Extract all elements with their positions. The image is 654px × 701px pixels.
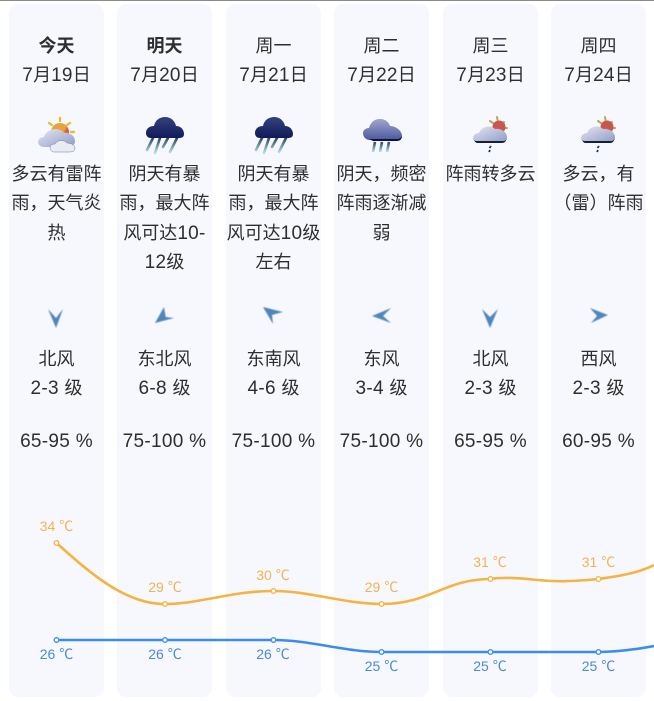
wind: 3-4 级 bbox=[356, 378, 407, 399]
icon: wind arrow north bbox=[482, 309, 498, 328]
wind: 2-3 级 bbox=[31, 378, 82, 399]
low temperature line: 26 ℃ bbox=[148, 646, 182, 662]
wind: 东风 bbox=[364, 349, 400, 369]
date: 7月24日 bbox=[564, 65, 633, 86]
icon: wind arrow northeast bbox=[154, 306, 174, 324]
low temperature line: 25 ℃ bbox=[365, 658, 398, 674]
description bbox=[120, 164, 210, 273]
high temperature line: 30 ℃ bbox=[256, 567, 290, 583]
description: 阵雨转多云 bbox=[446, 164, 536, 184]
wind: 北风 bbox=[472, 349, 508, 369]
panel: day 3 monday bbox=[226, 4, 321, 697]
panel: day 2 tomorrow bbox=[117, 4, 212, 697]
icon: wind arrow east bbox=[372, 308, 391, 324]
low temperature line: 26 ℃ bbox=[40, 646, 73, 662]
heading: thursday: 周四 bbox=[580, 36, 616, 56]
date: 7月19日 bbox=[22, 65, 91, 86]
description: 弱 bbox=[372, 223, 390, 243]
date: 7月22日 bbox=[347, 65, 416, 86]
wind: 西风 bbox=[580, 349, 616, 369]
description: 左右 bbox=[256, 252, 292, 272]
wind: 6-8 级 bbox=[139, 378, 190, 399]
description: 阴天有暴 bbox=[128, 164, 200, 184]
low temperature line: 25 ℃ bbox=[582, 658, 615, 674]
panel: day 5 wednesday bbox=[443, 4, 538, 697]
wind bbox=[356, 349, 407, 399]
description: 阴天有暴 bbox=[238, 164, 310, 184]
icon: wind arrow north bbox=[48, 309, 64, 328]
wind bbox=[246, 349, 300, 399]
low temperature line bbox=[40, 638, 654, 674]
description: 12级 bbox=[145, 252, 184, 273]
icon: wind arrow west bbox=[590, 308, 608, 324]
icon: shower to cloudy bbox=[473, 116, 508, 152]
low temperature line: 26 ℃ bbox=[256, 646, 290, 662]
wind: 东南风 bbox=[246, 349, 300, 369]
high temperature line: 29 ℃ bbox=[365, 579, 398, 595]
heading: wednesday: 周三 bbox=[472, 36, 508, 56]
high temperature line: 31 ℃ bbox=[582, 554, 615, 570]
description: 雨，最大阵 bbox=[228, 193, 318, 213]
icon: rain showers bbox=[363, 119, 402, 152]
description: 热 bbox=[48, 223, 66, 243]
high temperature line: 31 ℃ bbox=[473, 554, 507, 570]
wind: 2-3 级 bbox=[465, 378, 516, 399]
low temperature line: 25 ℃ bbox=[473, 658, 507, 674]
humidity: 60-95 % bbox=[562, 431, 635, 452]
heading: tomorrow: 明天 bbox=[146, 36, 182, 56]
description: 多云，有 bbox=[562, 164, 634, 184]
humidity: 65-95 % bbox=[454, 431, 527, 452]
description: （雷）阵雨 bbox=[554, 193, 644, 213]
icon: cloudy with sun bbox=[38, 116, 76, 152]
humidity: 65-95 % bbox=[20, 431, 93, 452]
date: 7月20日 bbox=[130, 65, 199, 86]
panel: day 4 tuesday bbox=[334, 4, 429, 697]
wind bbox=[573, 349, 624, 399]
high temperature line: 29 ℃ bbox=[148, 579, 182, 595]
humidity: 75-100 % bbox=[232, 431, 315, 452]
date: 7月21日 bbox=[239, 65, 308, 86]
description: 雨，最大阵 bbox=[120, 193, 210, 213]
wind: 东北风 bbox=[138, 349, 192, 369]
description bbox=[12, 164, 102, 243]
heading: tuesday: 周二 bbox=[364, 36, 400, 56]
heading: today: 今天 bbox=[38, 36, 74, 56]
heading: monday: 周一 bbox=[256, 36, 292, 56]
description bbox=[227, 164, 320, 272]
wind bbox=[138, 349, 192, 399]
wind: 4-6 级 bbox=[248, 378, 299, 399]
panel: day 6 thursday bbox=[551, 4, 646, 697]
icon: heavy rain bbox=[146, 117, 184, 154]
description: 阴天，频密 bbox=[336, 164, 426, 184]
icon: wind arrow southeast bbox=[262, 306, 283, 324]
humidity: 75-100 % bbox=[123, 431, 206, 452]
wind: 北风 bbox=[38, 349, 74, 369]
high temperature line bbox=[40, 518, 654, 606]
wind: 2-3 级 bbox=[573, 378, 624, 399]
icon: heavy rain bbox=[254, 117, 293, 154]
description: 阵雨逐渐减 bbox=[336, 193, 426, 213]
description: 风可达10- bbox=[123, 223, 206, 244]
panel: day 1 today bbox=[9, 4, 104, 697]
wind bbox=[31, 349, 82, 399]
humidity: 75-100 % bbox=[340, 431, 423, 452]
description bbox=[554, 164, 644, 213]
icon: cloudy with thunder shower bbox=[581, 116, 616, 152]
description: 多云有雷阵 bbox=[12, 164, 102, 184]
date: 7月23日 bbox=[456, 65, 525, 86]
description: 雨，天气炎 bbox=[12, 193, 102, 213]
wind bbox=[465, 349, 516, 399]
description: 风可达10级 bbox=[227, 223, 320, 244]
description bbox=[336, 164, 426, 243]
high temperature line: 34 ℃ bbox=[40, 518, 73, 534]
